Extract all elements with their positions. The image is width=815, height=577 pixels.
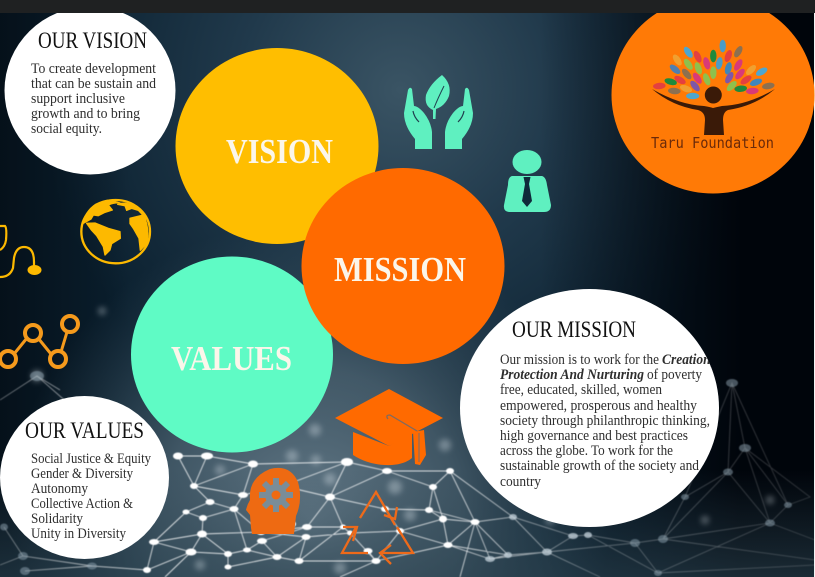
text: vision statement: growth and to bring: [31, 106, 140, 122]
text: mission statement: across the globe. To work for the: [500, 443, 673, 459]
text: mission statement: empowered, prosperous and healthy: [500, 398, 698, 414]
icon: recycle triangle arrows: [342, 492, 413, 564]
text: vision statement: support inclusive: [31, 91, 125, 107]
text: mission statement: Protection And Nurturing: [500, 367, 644, 383]
text: vision statement: that can be sustain and: [31, 76, 157, 92]
circle: mission: MISSION: [334, 250, 466, 289]
text: vision statement: [31, 61, 157, 137]
text: values list: Social Justice & Equity: [31, 451, 152, 467]
text: mission statement: Our mission is to work for the: [500, 352, 659, 368]
text: vision statement: To create development: [31, 61, 156, 77]
icon: stethoscope: [0, 226, 42, 277]
top bar: [0, 0, 815, 13]
circle: mission: [302, 168, 504, 364]
icon: hands holding leaf: [404, 75, 473, 149]
circle: vision: VISION: [226, 132, 333, 171]
right edge strip: [814, 13, 815, 577]
text: values list: Autonomy: [31, 481, 89, 497]
text: values list: [31, 451, 152, 542]
text: mission statement: society through philanthropic thinking,: [500, 413, 710, 429]
text: vision statement: social equity.: [31, 121, 102, 137]
icon: tree figure: [652, 86, 775, 135]
icon: graduation cap: [335, 389, 443, 465]
icon: line graph nodes: [0, 316, 78, 367]
text: mission statement: free, educated, skilled, women: [500, 382, 663, 398]
text: mission statement: of poverty: [647, 367, 703, 383]
text: values list: Collective Action &: [31, 496, 134, 512]
text: values list: Gender & Diversity: [31, 466, 134, 482]
circle: vision: [176, 48, 378, 244]
heading: our mission: OUR MISSION: [512, 317, 636, 342]
text: values list: Solidarity: [31, 511, 84, 527]
heading: our values: OUR VALUES: [25, 418, 144, 443]
text: values list: Unity in Diversity: [31, 526, 127, 542]
circle: values: [131, 256, 333, 452]
text: mission statement: sustainable growth of the society and: [500, 458, 700, 474]
icon: tree leaves: [653, 40, 775, 99]
panel: our values: [0, 396, 169, 559]
icon: person with tie: [504, 150, 551, 212]
text: mission statement: Creation,: [662, 352, 714, 368]
panel: our vision: [4, 6, 176, 174]
heading: our vision: OUR VISION: [38, 28, 147, 53]
network pattern: [0, 307, 815, 577]
icon: head with gear: [246, 468, 300, 534]
panel: our mission: [460, 289, 719, 527]
text: mission statement: [500, 352, 714, 490]
logo: taru foundation: [612, 0, 814, 194]
icon: globe: [81, 200, 150, 263]
circle: values: VALUES: [171, 339, 292, 378]
text: mission statement: high governance and best practices: [500, 428, 688, 444]
text: mission statement: country: [500, 474, 542, 490]
logo text: Taru Foundation: [651, 134, 774, 152]
